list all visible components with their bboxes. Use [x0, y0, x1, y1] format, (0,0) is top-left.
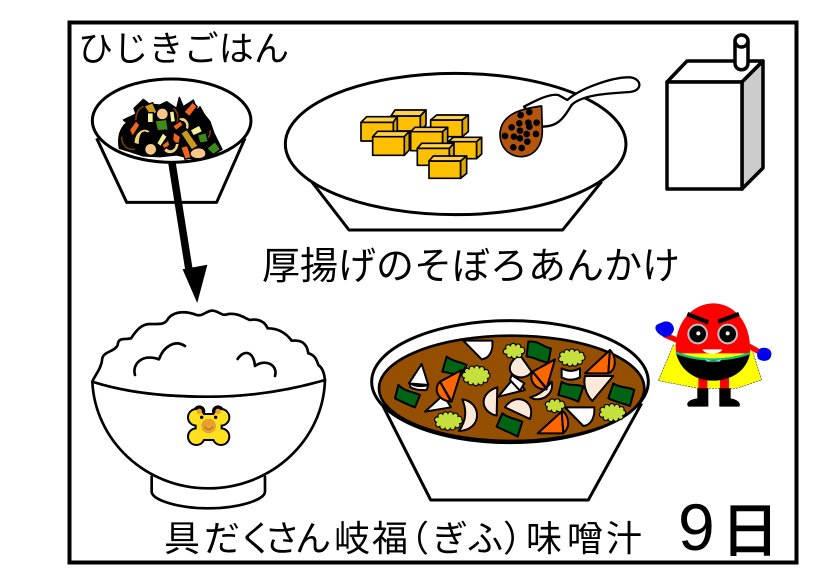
carrot pieces: [437, 350, 615, 433]
radish pieces: [459, 355, 613, 431]
spinach pieces: [395, 341, 634, 437]
heading: hijiki rice: ひじきごはん: [78, 30, 289, 69]
heading: atsuage with soboro sauce: 厚揚げのそぼろあんかけ: [262, 246, 680, 288]
broccoli pieces: [437, 346, 623, 428]
icon: hero mascot: [655, 303, 771, 407]
icon: atsuage plate with soboro sauce: [285, 73, 639, 230]
icon: hijiki bowl: [92, 79, 251, 202]
date label: [678, 490, 779, 564]
icon: miso soup bowl: [372, 321, 648, 500]
icon: rice bowl: [92, 311, 325, 508]
date label: 9: [678, 490, 715, 564]
spoon: [500, 77, 639, 157]
tofu cubes: [361, 110, 482, 178]
date label: 日: [721, 499, 779, 564]
arrow: hijiki to rice: [172, 163, 206, 300]
icon: milk carton: [667, 35, 763, 189]
bamboo shoot pieces: [409, 341, 594, 426]
icon: bear emblem on bowl: [189, 407, 228, 444]
heading: miso soup: 具だくさん岐福（ぎふ）味噌汁: [164, 518, 642, 559]
